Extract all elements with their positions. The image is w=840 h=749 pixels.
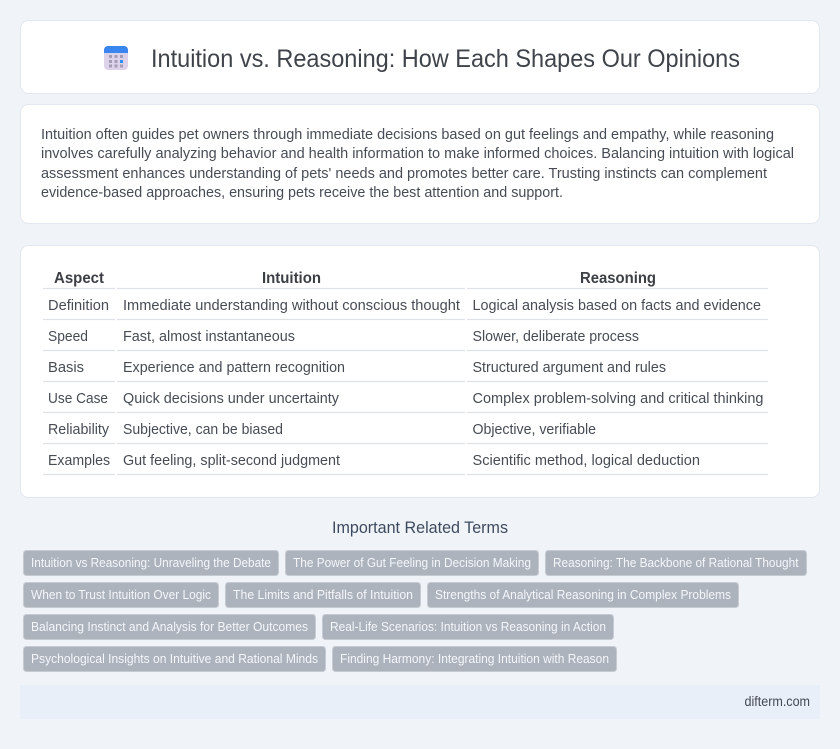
row: examples — [48, 452, 700, 469]
panel: introduction — [20, 104, 820, 224]
row: speed: Fast, almost instantaneous — [123, 328, 295, 345]
row: definition: Logical analysis based on facts and evidence — [472, 297, 761, 314]
row: examples: Scientific method, logical deduction — [472, 452, 700, 469]
intro text: evidence-based approaches, ensuring pets receive the best attention and support. — [41, 184, 563, 201]
tag — [322, 614, 614, 640]
row: basis: Structured argument and rules — [472, 359, 666, 376]
tag: Finding Harmony: Integrating Intuition with Reason — [340, 651, 609, 666]
tag — [226, 582, 420, 608]
tag — [428, 582, 738, 608]
row: use case: Quick decisions under uncertainty — [123, 390, 339, 407]
tag — [24, 646, 326, 672]
tag: Reasoning: The Backbone of Rational Thought — [553, 555, 799, 570]
heading: related terms: Important Related Terms — [332, 518, 508, 537]
panel: comparison table — [20, 246, 820, 498]
tag: Psychological Insights on Intuitive and Rational Minds — [31, 651, 318, 666]
tag — [24, 582, 218, 608]
icon: calendar — [104, 46, 128, 70]
tag: The Power of Gut Feeling in Decision Making — [293, 555, 531, 570]
tag — [546, 550, 806, 576]
intro text: assessment enhances understanding of pets' needs and promotes better care. Trusting instincts can complement — [41, 165, 768, 182]
table header: Reasoning — [580, 270, 656, 287]
table header: Intuition — [262, 270, 321, 287]
tag: Intuition vs Reasoning: Unraveling the Debate — [31, 555, 271, 570]
table header: Aspect — [54, 270, 104, 287]
row: use case: Use Case — [48, 390, 108, 407]
related term tags — [24, 550, 806, 672]
row: reliability: Subjective, can be biased — [123, 421, 283, 438]
tag — [24, 550, 278, 576]
row: basis — [48, 359, 666, 376]
tag: The Limits and Pitfalls of Intuition — [233, 587, 413, 602]
row: examples: Gut feeling, split-second judgment — [123, 452, 341, 469]
row: speed — [48, 328, 639, 345]
table header — [54, 270, 656, 287]
row: reliability: Objective, verifiable — [472, 421, 596, 438]
row: definition: Immediate understanding without conscious thought — [123, 297, 461, 314]
row: use case: Complex problem-solving and critical thinking — [472, 390, 764, 407]
title: Intuition vs. Reasoning: How Each Shapes Our Opinions — [151, 45, 740, 73]
tag: Real-Life Scenarios: Intuition vs Reasoning in Action — [330, 619, 606, 634]
intro text: Intuition often guides pet owners through immediate decisions based on gut feelings and empathy, while reasoning — [41, 126, 774, 143]
row: reliability — [48, 421, 596, 438]
intro text — [41, 126, 794, 201]
tag: Balancing Instinct and Analysis for Better Outcomes — [31, 619, 308, 634]
tag: Strengths of Analytical Reasoning in Complex Problems — [435, 587, 731, 602]
footer — [20, 685, 820, 719]
row: speed: Slower, deliberate process — [472, 328, 639, 345]
tag: When to Trust Intuition Over Logic — [31, 587, 212, 602]
row: examples: Examples — [48, 452, 110, 469]
row: basis: Experience and pattern recognition — [123, 359, 345, 376]
intro text: involves carefully analyzing behavior and health information to make informed choices. Balancing intuition with logical — [41, 145, 794, 162]
panel: header — [20, 20, 820, 94]
tag — [332, 646, 616, 672]
row: definition: Definition — [48, 297, 109, 314]
row: speed: Speed — [48, 328, 88, 345]
row: use case — [48, 390, 764, 407]
footer source: difterm.com — [744, 694, 810, 709]
row: basis: Basis — [48, 359, 84, 376]
row: definition — [48, 297, 761, 314]
tag — [24, 614, 316, 640]
row: reliability: Reliability — [48, 421, 109, 438]
tag — [286, 550, 538, 576]
